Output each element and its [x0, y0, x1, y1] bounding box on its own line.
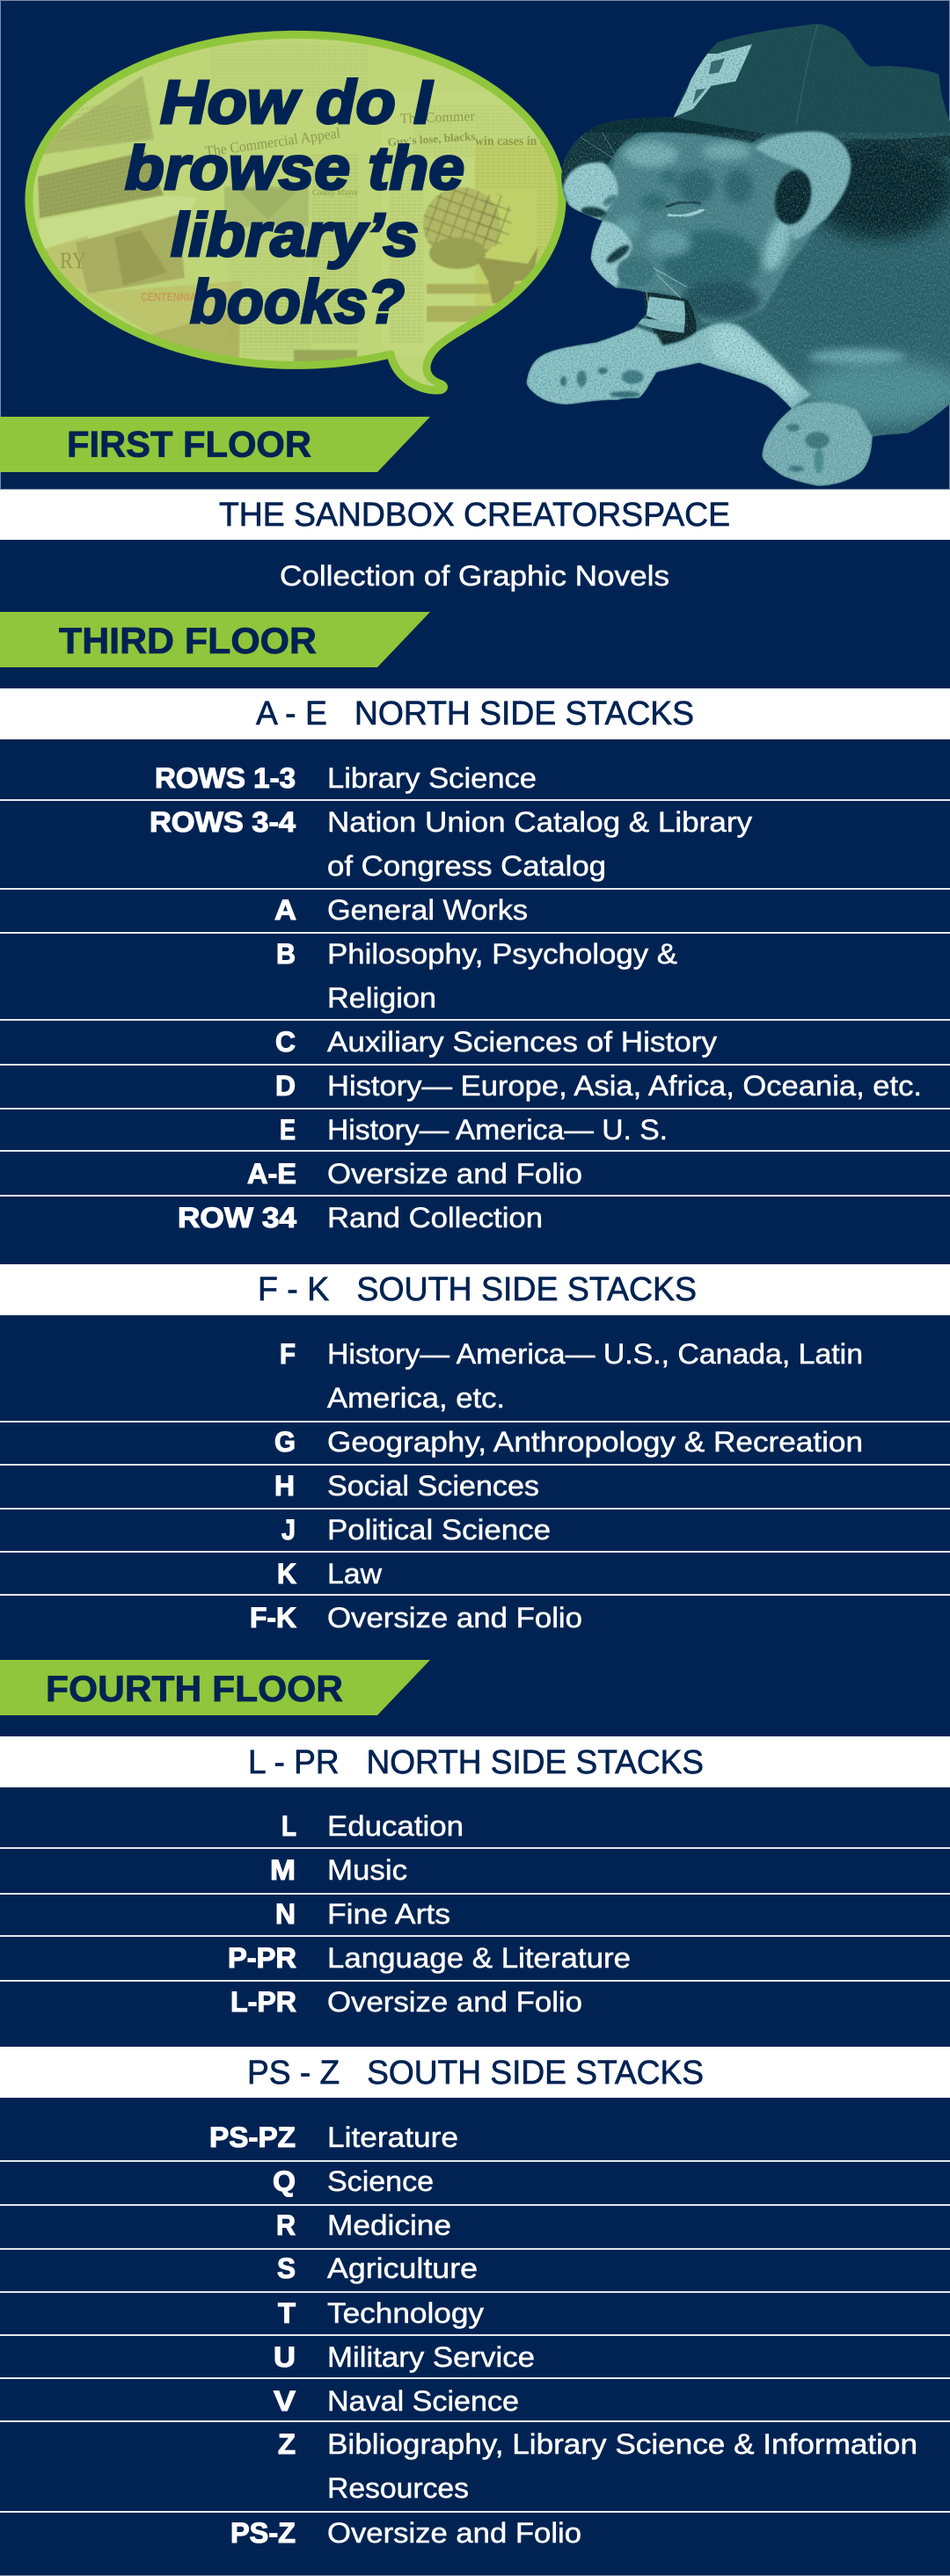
row: N: N [275, 1898, 296, 1930]
row: V: V [274, 2385, 296, 2417]
row: C: C [275, 1026, 296, 1058]
row: K: K [277, 1558, 296, 1590]
row: G: G [274, 1426, 296, 1458]
row: F-K: F-K [250, 1602, 296, 1634]
row: Z: Z [278, 2428, 296, 2460]
row: T: T [278, 2297, 296, 2329]
row: M: Music [327, 1854, 407, 1886]
row: rows 3-4: of Congress Catalog [327, 850, 606, 882]
row: rows 1-3: ROWS 1-3 [155, 762, 296, 794]
row: PS-PZ [209, 2121, 458, 2153]
row: L: L [281, 1810, 296, 1842]
title [125, 68, 464, 336]
row: R: R [276, 2209, 296, 2241]
row: PS-PZ: PS-PZ [209, 2121, 296, 2153]
speech bubble with newspaper collage: CENTENNIAL [141, 290, 202, 303]
cap brim [561, 118, 766, 189]
list: third floor south rows [250, 1338, 863, 1634]
row: M: M [270, 1854, 296, 1886]
row: Z [278, 2428, 917, 2504]
row: Q [273, 2165, 434, 2197]
icon: lion cub wearing a baseball cap [521, 16, 950, 495]
row: R: Medicine [327, 2209, 451, 2241]
row: T [278, 2297, 484, 2329]
text: collection of graphic novels: Collection of Graphic Novels [280, 560, 669, 592]
row: L-PR: Oversize and Folio [327, 1986, 582, 2018]
muzzle and nose [591, 221, 632, 287]
row: C: Auxiliary Sciences of History [327, 1026, 717, 1058]
row: rows 3-4: ROWS 3-4 [150, 806, 296, 838]
panel: A-E north side stacks [0, 688, 950, 739]
row: H: Social Sciences [327, 1470, 539, 1502]
first floor banner [0, 417, 430, 472]
row: B: Philosophy, Psychology & [327, 938, 677, 970]
first floor banner: FIRST FLOOR [67, 424, 311, 464]
row: L: Education [327, 1810, 464, 1842]
row: F: History— America— U.S., Canada, Latin [327, 1338, 863, 1370]
row: V: Naval Science [327, 2385, 519, 2417]
speech bubble with newspaper collage: The Commer [400, 109, 476, 127]
panel: F-K south side stacks [0, 1264, 950, 1315]
panel: L-PR north side stacks: L - PR NORTH SIDE STACKS [248, 1744, 704, 1781]
title: library’s [171, 200, 419, 269]
row: J: Political Science [327, 1514, 551, 1546]
row: U: U [274, 2341, 296, 2373]
row: R [276, 2209, 451, 2241]
row: S [277, 2252, 478, 2284]
panel: header illustration [0, 0, 950, 495]
cap logo [674, 44, 752, 118]
row: A: General Works [327, 894, 528, 926]
head [591, 132, 851, 324]
title: browse the [125, 134, 464, 202]
panel: L-PR north side stacks [0, 1736, 950, 1787]
row: A-E: A-E [247, 1158, 296, 1190]
panel: F-K south side stacks: F - K SOUTH SIDE STACKS [258, 1271, 697, 1308]
speech bubble with newspaper collage: win cases in c [475, 135, 545, 149]
third floor banner: THIRD FLOOR [59, 620, 317, 661]
row: rows 1-3 [155, 762, 537, 794]
row: F [280, 1338, 863, 1414]
row: rows 3-4 [150, 806, 752, 882]
fourth floor banner [0, 1660, 430, 1715]
row: E: History— America— U. S. [327, 1114, 668, 1146]
speech bubble with newspaper collage: Guy's lose, blacks [387, 129, 476, 149]
row: rows 3-4: Nation Union Catalog & Library [327, 806, 752, 838]
list: fourth floor north rows [228, 1810, 631, 2018]
row: F: F [280, 1338, 296, 1370]
row: T: Technology [327, 2297, 484, 2329]
row: P-PR [228, 1942, 631, 1974]
fourth floor banner: FOURTH FLOOR [46, 1668, 343, 1709]
row: rows 1-3: Library Science [327, 762, 537, 794]
row: U: Military Service [327, 2341, 535, 2373]
row: M [270, 1854, 407, 1886]
row: L [281, 1810, 464, 1842]
speech bubble with newspaper collage: The Commercial Appeal [204, 125, 341, 160]
row: G: Geography, Anthropology & Recreation [327, 1426, 863, 1458]
row: Z: Bibliography, Library Science & Information [327, 2428, 917, 2460]
panel: PS-Z south side stacks: PS - Z SOUTH SIDE STACKS [247, 2055, 704, 2092]
row: N [275, 1898, 450, 1930]
speech bubble with newspaper collage [18, 18, 581, 404]
row: Z: Resources [327, 2472, 469, 2504]
row: PS-PZ: Literature [327, 2121, 458, 2153]
panel: the sandbox creatorspace [0, 490, 950, 540]
row: F-K: Oversize and Folio [327, 1602, 582, 1634]
panel: A-E north side stacks: A - E NORTH SIDE STACKS [256, 695, 694, 732]
front paw and chest [527, 324, 811, 409]
row: row 34: Rand Collection [327, 1202, 543, 1233]
speech bubble with newspaper collage: County Mayor [312, 188, 358, 197]
row: D: D [275, 1070, 296, 1102]
row: D: History— Europe, Asia, Africa, Oceania, etc. [327, 1070, 922, 1102]
row: Q: Science [327, 2165, 434, 2197]
row: row 34: ROW 34 [178, 1202, 296, 1233]
row: Q: Q [273, 2165, 296, 2197]
right ear [756, 132, 851, 240]
row: B: Religion [327, 982, 436, 1014]
row: P-PR: Language & Literature [327, 1942, 631, 1974]
row: L-PR: L-PR [230, 1986, 296, 2018]
row: PS-Z: Oversize and Folio [327, 2517, 581, 2549]
row: A-E: Oversize and Folio [327, 1158, 582, 1190]
row: S: S [277, 2252, 296, 2284]
row: B [276, 938, 677, 1014]
mouth and tongue [643, 292, 697, 346]
panel: PS-Z south side stacks [0, 2047, 950, 2098]
row: S: Agriculture [327, 2252, 478, 2284]
row: P-PR: P-PR [228, 1942, 296, 1974]
cap crown [674, 24, 950, 140]
list: fourth floor south rows [209, 2121, 917, 2549]
speech bubble with newspaper collage: RY [60, 248, 86, 273]
third floor banner [0, 612, 430, 667]
row: L-PR [230, 1986, 582, 2018]
row: row 34 [178, 1202, 543, 1233]
row: K [277, 1558, 383, 1590]
left ear [563, 163, 618, 221]
rear paw [762, 403, 873, 486]
panel: the sandbox creatorspace: THE SANDBOX CREATORSPACE [219, 497, 730, 534]
row: F: America, etc. [327, 1382, 505, 1414]
row: H: H [274, 1470, 295, 1502]
row: A: A [274, 894, 296, 926]
row: K: Law [327, 1558, 383, 1590]
row: PS-Z [230, 2517, 581, 2549]
row: PS-Z: PS-Z [230, 2517, 296, 2549]
title: books? [190, 267, 405, 336]
list: third floor north rows [150, 762, 922, 1233]
row: E: E [280, 1114, 296, 1146]
row: J: J [281, 1514, 296, 1546]
title: How do I [160, 68, 434, 136]
row: N: Fine Arts [327, 1898, 450, 1930]
row: B: B [276, 938, 296, 970]
